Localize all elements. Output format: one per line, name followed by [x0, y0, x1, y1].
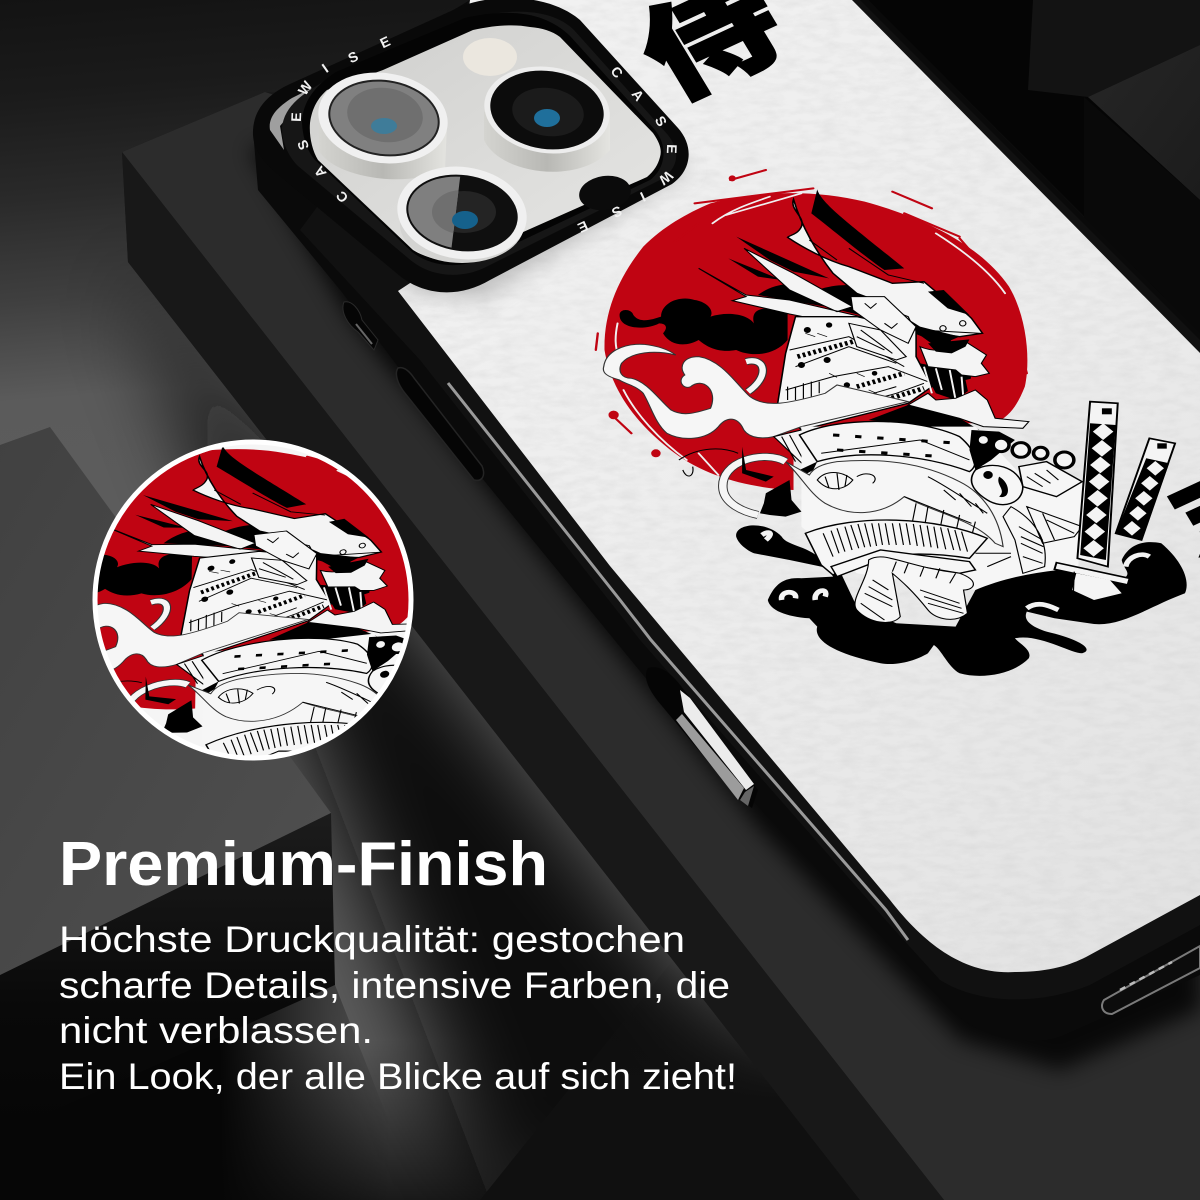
phone back panel	[340, 0, 1200, 990]
phone shadow on plinth	[250, 100, 1200, 1070]
body copy	[59, 919, 737, 1097]
brand lettering: CASEWISE (left): S	[345, 48, 361, 66]
brand lettering: CASEWISE (left): S	[294, 138, 312, 152]
brand lettering: CASEWISE (left): I	[319, 60, 331, 76]
detail circle: artwork close-up	[92, 440, 414, 760]
brand lettering: CASEWISE (left)	[288, 33, 393, 206]
brand lettering: CASEWISE (left): E	[288, 112, 304, 122]
camera island	[253, 0, 689, 292]
printed samurai dragon artwork	[596, 170, 1187, 676]
body copy: Ein Look, der alle Blicke auf sich zieht!	[59, 1056, 737, 1097]
brand lettering: CASEWISE (right): A	[629, 86, 647, 104]
dark inner band	[302, 13, 664, 265]
brand lettering: CASEWISE (right)	[575, 63, 680, 236]
brand lettering: CASEWISE (right): C	[608, 63, 626, 81]
brand lettering: CASEWISE (right): I	[638, 189, 648, 205]
heading: Premium-Finish	[59, 830, 548, 899]
bumper silver highlight	[448, 383, 908, 940]
block: top right corner	[868, 0, 1200, 340]
brand lettering: CASEWISE (left): E	[377, 33, 393, 51]
brand lettering: CASEWISE (left): W	[295, 77, 316, 98]
body copy: Höchste Druckqualität: gestochen	[59, 919, 685, 960]
body copy: scharfe Details, intensive Farben, die	[59, 965, 730, 1006]
mute switch recess	[343, 302, 378, 350]
power button	[646, 667, 758, 808]
lens two	[479, 59, 615, 172]
phone	[253, 0, 1200, 1041]
brand lettering: CASEWISE (right): W	[655, 168, 676, 189]
block: small foreground cube	[0, 427, 420, 1200]
lens one	[312, 64, 454, 179]
black text ring	[282, 12, 676, 275]
brand lettering: CASEWISE (left): A	[311, 163, 329, 181]
brand lettering: CASEWISE (right): S	[609, 203, 625, 221]
island outer frame	[253, 0, 689, 292]
brand lettering: CASEWISE (right): E	[575, 218, 591, 236]
brand lettering: CASEWISE (right): E	[664, 144, 680, 154]
volume buttons	[396, 368, 484, 480]
camera window glass	[310, 25, 661, 260]
charging port	[1102, 946, 1200, 1014]
brand lettering: CASEWISE (left): C	[333, 188, 351, 206]
phone bumper	[253, 0, 1200, 1041]
body copy: nicht verblassen.	[59, 1010, 373, 1051]
microphone hole	[577, 173, 633, 213]
flash	[463, 38, 517, 76]
brand lettering: CASEWISE (right): S	[652, 113, 670, 129]
bumper inner shade	[300, 0, 1200, 999]
lens three	[397, 166, 526, 263]
silver inner glint	[270, 88, 312, 150]
